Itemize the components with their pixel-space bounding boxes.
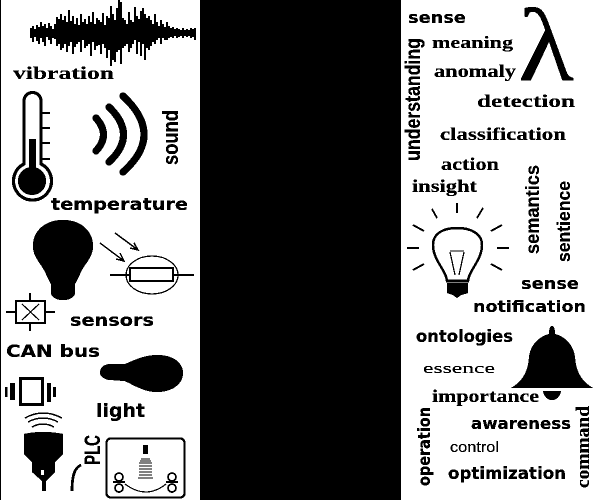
label: ontologies: ontologies — [416, 327, 513, 347]
icon: light bulb with rays — [407, 203, 509, 298]
icon: sound waves — [96, 96, 144, 172]
label: notification: notification — [473, 297, 586, 316]
icon: photoresistor — [100, 233, 194, 294]
label: CAN bus: CAN bus — [6, 342, 100, 362]
label: essence: essence — [423, 361, 496, 377]
label: semantics: semantics — [523, 165, 544, 254]
label: PLC: PLC — [80, 435, 105, 465]
label: vibration: vibration — [13, 63, 114, 83]
label: light: light — [96, 400, 145, 422]
label: detection: detection — [477, 91, 575, 111]
label: command: command — [573, 406, 594, 488]
label: understanding: understanding — [402, 38, 425, 161]
label: sense: sense — [408, 8, 466, 27]
label: classification: classification — [440, 124, 566, 144]
label: optimization: optimization — [448, 464, 566, 484]
label: anomaly: anomaly — [434, 61, 516, 81]
label: insight: insight — [412, 176, 477, 196]
label: awareness: awareness — [471, 414, 571, 433]
label: action: action — [441, 154, 499, 174]
icon: black light bulb sideways — [100, 355, 183, 392]
label: sound: sound — [158, 110, 183, 165]
label: sense: sense — [521, 274, 579, 293]
icon: crossed box symbol — [6, 293, 55, 331]
label: control: control — [450, 439, 499, 456]
icon: black light bulb upright — [33, 220, 93, 300]
label: meaning: meaning — [432, 33, 514, 52]
icon: vibration waveform — [31, 0, 195, 66]
label: temperature: temperature — [51, 195, 188, 215]
icon: vibrating device — [5, 378, 56, 404]
icon: PLC module box — [106, 438, 184, 498]
label: sensors: sensors — [70, 311, 154, 331]
panel: sensing inputs — [1, 0, 200, 500]
icon: thermometer — [13, 93, 51, 200]
label: operation: operation — [415, 407, 435, 486]
label: importance: importance — [432, 386, 539, 406]
icon: wireless sensor probe — [24, 413, 63, 491]
icon: bell — [511, 326, 593, 400]
label: sentience: sentience — [554, 181, 574, 262]
icon: cable curve — [72, 465, 81, 491]
panel: understanding outputs — [401, 0, 600, 500]
